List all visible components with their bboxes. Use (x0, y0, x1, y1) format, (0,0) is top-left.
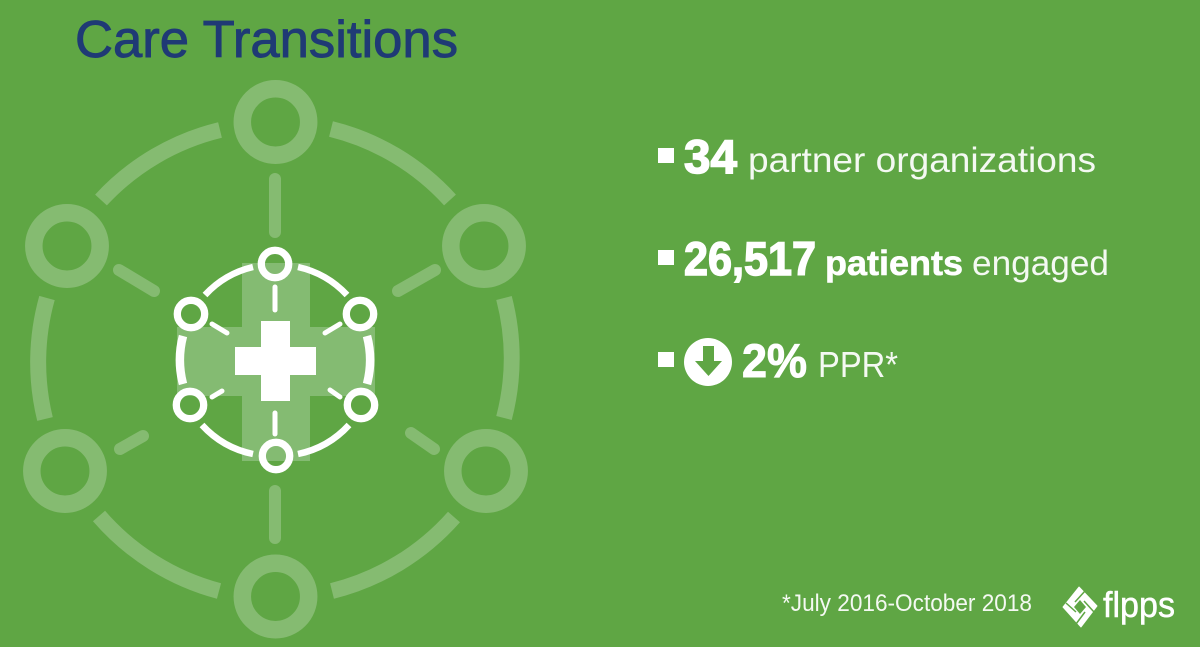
inner nodes (176, 250, 375, 470)
inner ring arcs (202, 267, 349, 454)
outer nodes (32, 89, 519, 630)
central network icon (176, 250, 375, 470)
background cross (177, 263, 375, 461)
outer network diagram (32, 89, 519, 630)
stat: patients engaged (658, 232, 1109, 285)
inner spokes (212, 287, 340, 434)
stat: PPR reduction: 2% (742, 334, 807, 387)
stat: PPR reduction: PPR* (818, 344, 898, 385)
stat: partner organizations (658, 130, 1096, 183)
title: Care Transitions (75, 11, 458, 69)
stat: patients engaged: engaged (972, 244, 1109, 283)
outer spokes (119, 179, 435, 538)
flpps logo: flpps (1103, 584, 1175, 625)
outer ring arcs (38, 129, 512, 591)
icon: down arrow (684, 338, 732, 386)
stat: PPR reduction (658, 334, 898, 387)
stat: partner organizations: partner organizations (748, 141, 1096, 180)
stat: patients engaged: 26,517 (684, 232, 816, 285)
inner side arcs (180, 336, 370, 384)
stat: partner organizations: 34 (684, 130, 737, 183)
stat: patients engaged: patients (825, 244, 963, 283)
flpps logo (1063, 584, 1175, 627)
icon: medical cross (235, 321, 316, 401)
footnote: *July 2016-October 2018 (782, 590, 1032, 617)
icon: logo diamond (1063, 587, 1097, 627)
